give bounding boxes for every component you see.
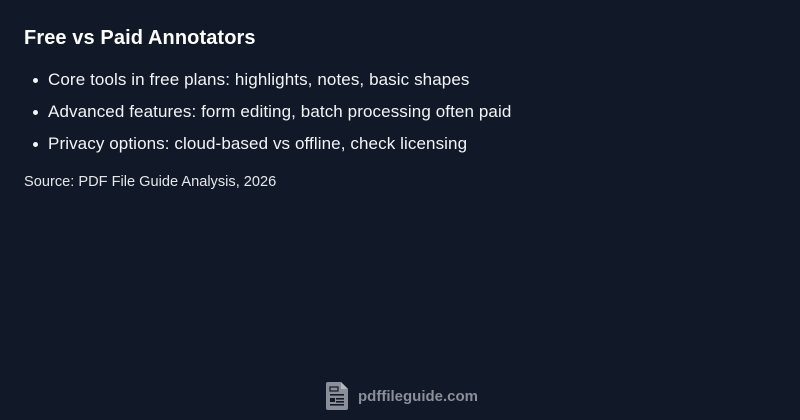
source note: Source: PDF File Guide Analysis, 2026 [24,174,276,190]
footer logo [326,382,478,410]
bullet list: Advanced features: form editing, batch processing often paid [48,102,511,121]
bullet list [33,70,511,153]
bullet list: Core tools in free plans: highlights, notes, basic shapes [48,70,470,89]
title: Free vs Paid Annotators [24,27,256,49]
bullet list: Privacy options: cloud-based vs offline, check licensing [48,134,467,153]
footer logo: pdffileguide.com [358,388,478,404]
icon: document [326,382,348,410]
